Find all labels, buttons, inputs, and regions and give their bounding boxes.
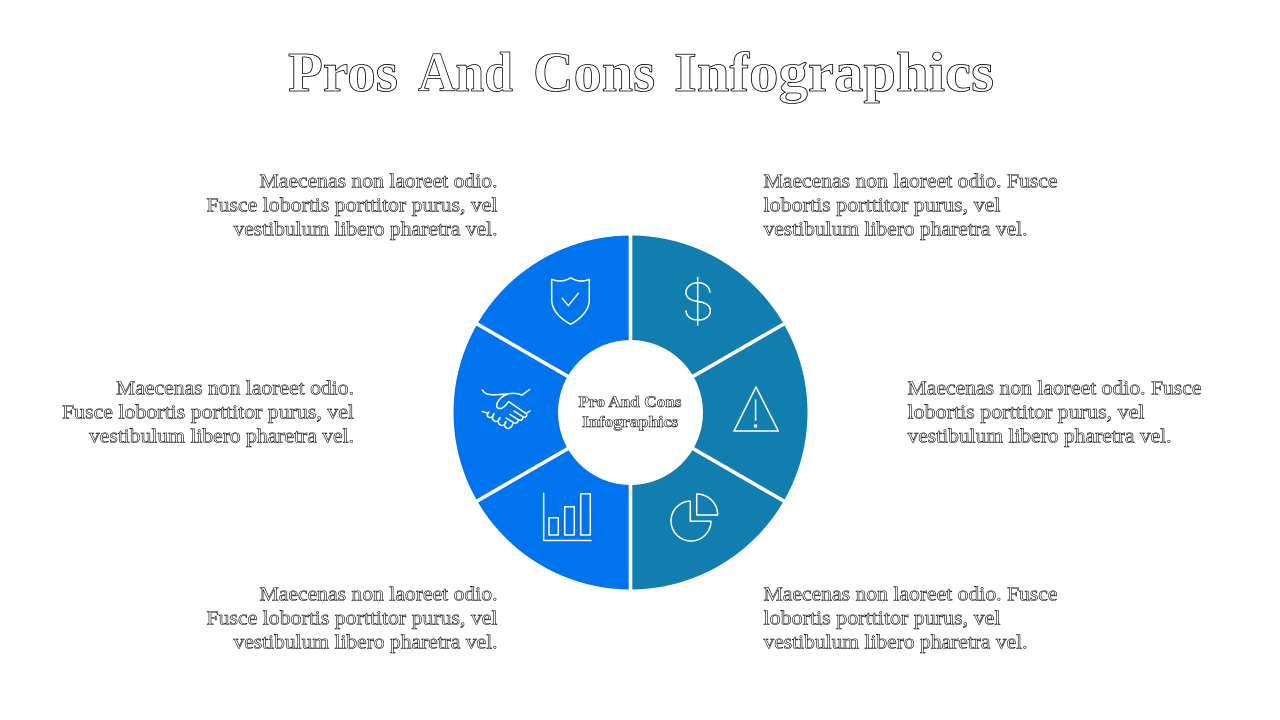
title [288,42,994,104]
text block: top right: Maecenas non laoreet odio. Fusce [764,170,1058,192]
text block: top left: Fusce lobortis porttitor purus, vel [206,194,498,216]
text block: bottom right: vestibulum libero pharetra vel. [764,632,1028,654]
text block: middle left [62,378,354,448]
center label [578,394,682,431]
center label: Infographics [582,414,678,431]
donut chart [454,230,808,595]
text block: middle right: vestibulum libero pharetra vel. [908,426,1172,448]
icon: bar chart [544,493,591,540]
text block: top left [206,170,498,240]
text block: top left: vestibulum libero pharetra vel. [234,218,498,240]
segment: pros left half [454,236,630,590]
text block: bottom left: vestibulum libero pharetra vel. [234,632,498,654]
center circle [558,340,703,485]
icon: pie chart [671,494,718,541]
title: Infographics [674,42,994,104]
center label: Pro And Cons [578,394,682,411]
text block: bottom left: Maecenas non laoreet odio. [260,584,498,606]
icon: dollar sign [686,278,710,325]
icon: shield with check [552,278,589,324]
text block: top left: Maecenas non laoreet odio. [260,170,498,192]
text block: bottom right: lobortis porttitor purus, vel [764,608,1001,630]
text block: middle left: Fusce lobortis porttitor purus, vel [62,402,354,424]
title: Pros [288,42,398,104]
text block: top right: lobortis porttitor purus, vel [764,194,1001,216]
text block: top right: vestibulum libero pharetra vel. [764,218,1028,240]
text block: middle right [908,378,1202,448]
text block: middle left: vestibulum libero pharetra vel. [89,426,354,448]
text block: bottom left: Fusce lobortis porttitor purus, vel [206,608,498,630]
title: And [418,42,513,104]
title: Cons [533,42,655,104]
text block: bottom left [206,584,498,654]
text block: bottom right [764,584,1058,654]
text block: middle right: lobortis porttitor purus, vel [908,402,1145,424]
text block: bottom right: Maecenas non laoreet odio. Fusce [764,584,1058,606]
icon: warning triangle [734,387,778,431]
segment dividers [472,230,789,595]
text block: top right [764,170,1058,240]
icon: handshake [482,390,530,428]
text block: middle left: Maecenas non laoreet odio. [116,378,354,400]
text block: middle right: Maecenas non laoreet odio. Fusce [908,378,1202,400]
segment: cons right half [630,236,808,590]
